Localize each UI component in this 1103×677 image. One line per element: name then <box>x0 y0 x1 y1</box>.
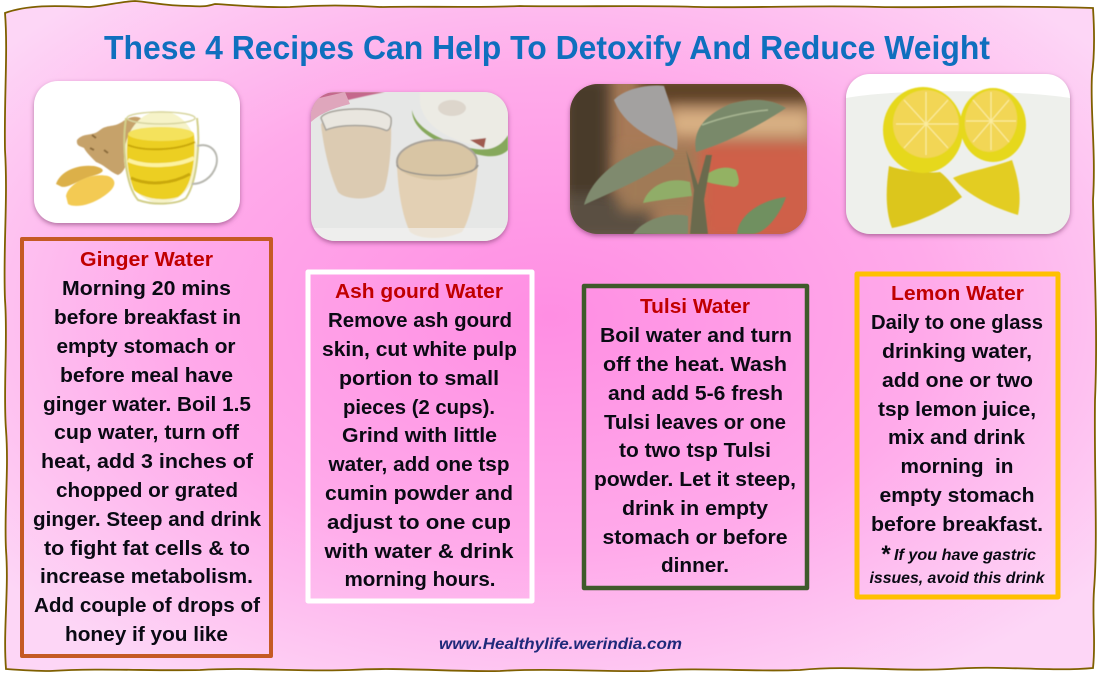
heading: ginger water: Ginger Water <box>80 248 213 271</box>
text block: ginger water recipe: before breakfast in <box>54 306 241 329</box>
text block: ash gourd recipe: skin, cut white pulp <box>322 338 517 361</box>
text block: tulsi recipe: stomach or before <box>602 526 788 549</box>
text block: tulsi recipe: to two tsp Tulsi <box>619 439 771 462</box>
heading: lemon water: Lemon Water <box>891 282 1024 305</box>
image: tulsi leaves <box>562 76 815 242</box>
text block: ginger water recipe: cup water, turn off <box>54 421 239 444</box>
text block: ash gourd recipe: portion to small <box>339 367 499 390</box>
text block: ginger water recipe: Morning 20 mins <box>62 277 231 300</box>
callout: gastric warning: issues, avoid this drink <box>870 570 1046 587</box>
text block: ash gourd recipe: with water & drink <box>323 540 514 563</box>
callout: gastric warning <box>870 541 1046 587</box>
text block: ginger water recipe: honey if you like <box>65 623 228 646</box>
text block: ginger water recipe: increase metabolism. <box>40 565 253 588</box>
text block: tulsi recipe: drink in empty <box>622 497 769 520</box>
callout: gastric warning: * <box>881 541 891 568</box>
text block: ginger water recipe: ginger. Steep and drink <box>33 508 262 531</box>
text block: tulsi recipe: off the heat. Wash <box>603 353 787 376</box>
text block: ginger water recipe: chopped or grated <box>56 479 238 502</box>
text block: ginger water recipe: empty stomach or <box>56 335 236 358</box>
text block: ash gourd recipe: pieces (2 cups). <box>343 396 495 419</box>
text block: lemon recipe: empty stomach <box>880 484 1034 507</box>
text block: tulsi recipe: dinner. <box>661 554 729 577</box>
heading: ash gourd water: Ash gourd Water <box>335 280 503 303</box>
text block: lemon recipe: tsp lemon juice, <box>878 398 1036 421</box>
text block: tulsi recipe <box>594 324 796 577</box>
text block: ash gourd recipe <box>322 309 517 591</box>
text block: ash gourd recipe: morning hours. <box>344 568 496 591</box>
text block: ash gourd recipe: adjust to one cup <box>327 511 511 534</box>
image: ash gourd juice <box>311 92 508 241</box>
text block: ash gourd recipe: cumin powder and <box>325 482 513 505</box>
text block: ash gourd recipe: Grind with little <box>342 424 497 447</box>
text block: tulsi recipe: powder. Let it steep, <box>594 468 796 491</box>
text block: lemon recipe: drinking water, <box>882 340 1032 363</box>
title: These 4 Recipes Can Help To Detoxify And Reduce Weight <box>104 29 990 66</box>
text block: ginger water recipe: to fight fat cells & to <box>44 537 250 560</box>
text block: lemon recipe: mix and drink <box>888 426 1026 449</box>
text block: ginger water recipe: before meal have <box>60 364 233 387</box>
website link: www.Healthylife.werindia.com <box>439 636 682 653</box>
panel: ash gourd water <box>308 272 532 601</box>
text block: lemon recipe <box>871 311 1043 536</box>
image: ginger and tea <box>34 81 240 223</box>
panel: lemon water <box>857 274 1058 597</box>
text block: lemon recipe: add one or two <box>882 369 1033 392</box>
text block: lemon recipe: Daily to one glass <box>871 311 1043 334</box>
text block: ginger water recipe: ginger water. Boil 1.5 <box>43 393 251 416</box>
text block: ginger water recipe: Add couple of drops of <box>34 594 260 617</box>
panel: tulsi water <box>584 286 807 588</box>
image: lemon halves <box>846 74 1070 234</box>
text block: tulsi recipe: Boil water and turn <box>600 324 792 347</box>
text block: ash gourd recipe: water, add one tsp <box>327 453 510 476</box>
text block: lemon recipe: before breakfast. <box>871 513 1043 536</box>
callout: gastric warning: If you have gastric <box>894 547 1036 564</box>
text block: ginger water recipe: heat, add 3 inches of <box>41 450 253 473</box>
text block: tulsi recipe: and add 5-6 fresh <box>608 382 783 405</box>
text block: ash gourd recipe: Remove ash gourd <box>328 309 512 332</box>
text block: ginger water recipe <box>33 277 262 646</box>
text block: lemon recipe: morning in <box>900 455 1014 478</box>
heading: tulsi water: Tulsi Water <box>640 295 750 318</box>
text block: tulsi recipe: Tulsi leaves or one <box>604 411 786 434</box>
panel: ginger water <box>22 239 271 656</box>
